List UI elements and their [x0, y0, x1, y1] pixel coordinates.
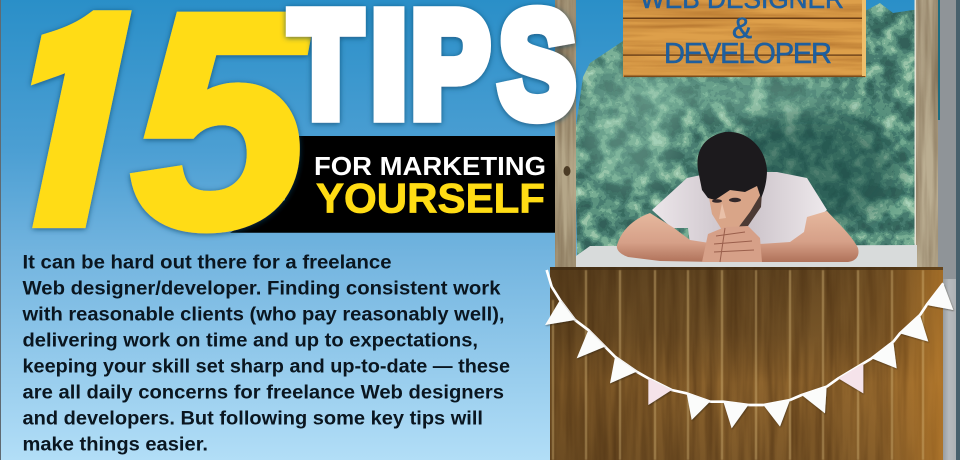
right wooden post	[914, 0, 938, 270]
left page edge	[0, 0, 1, 460]
pink flags	[648, 363, 863, 405]
sign lettering	[640, 0, 844, 70]
hair	[697, 132, 767, 200]
sign lettering: DEVELOPER	[664, 38, 832, 70]
white word TIPS	[290, 0, 575, 148]
left wooden post	[555, 0, 576, 270]
intro paragraph	[21, 252, 510, 455]
intro paragraph: keeping your skill set sharp and up-to-date — these	[22, 356, 510, 377]
eyes	[712, 198, 741, 203]
bunting garland	[545, 270, 953, 428]
left arm	[617, 213, 716, 262]
plank gaps	[553, 270, 923, 460]
man leaning on counter	[617, 132, 859, 262]
beard shadow	[738, 192, 762, 228]
nose shadow	[719, 203, 726, 219]
white flags	[545, 283, 953, 428]
hanging sign	[623, 0, 866, 77]
neck and face	[708, 180, 762, 230]
intro paragraph: with reasonable clients (who pay reasonably well),	[21, 304, 504, 325]
shirt	[652, 172, 827, 244]
intro paragraph: Web designer/developer. Finding consistent work	[22, 278, 501, 299]
clasped hands	[702, 226, 762, 262]
illustration: lemonade-style stand	[545, 0, 953, 460]
right grey margin strip	[937, 0, 960, 460]
intro paragraph: are all daily concerns for freelance Web designers	[22, 382, 504, 403]
intro paragraph: It can be hard out there for a freelance	[22, 252, 392, 273]
right arm	[745, 211, 859, 262]
intro paragraph: make things easier.	[22, 434, 208, 455]
wooden stand front panel	[550, 267, 943, 460]
intro paragraph: delivering work on time and up to expectations,	[22, 330, 478, 351]
subtitle: FOR MARKETING	[314, 151, 546, 181]
counter top	[576, 245, 917, 268]
garland string	[547, 270, 943, 405]
intro paragraph: and developers. But following some key tips will	[22, 408, 483, 429]
tree foliage	[570, 0, 920, 260]
big yellow number 15	[0, 0, 314, 291]
black subtitle box	[230, 136, 555, 233]
sign lettering: &	[732, 12, 752, 45]
subtitle	[314, 151, 546, 222]
subtitle: YOURSELF	[316, 174, 545, 222]
